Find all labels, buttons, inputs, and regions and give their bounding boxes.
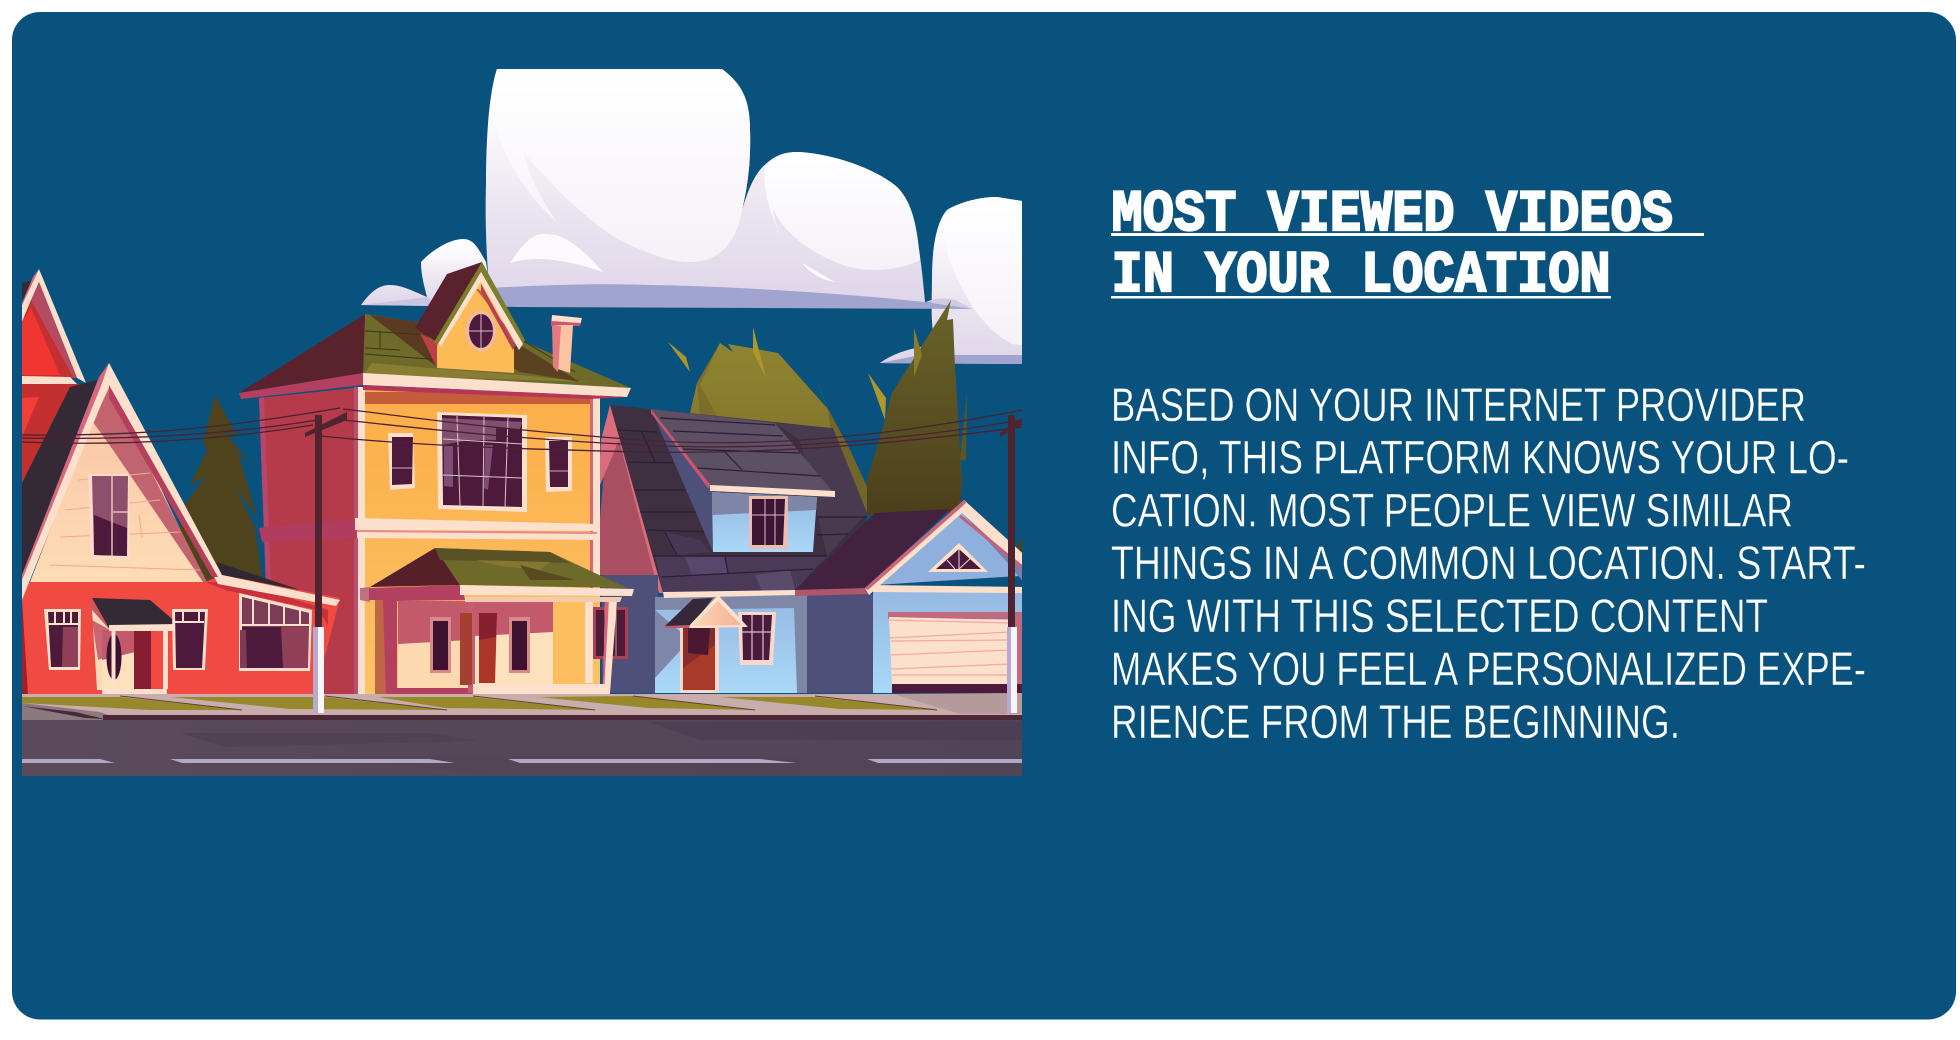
chimney [551,315,582,373]
centre window [172,609,208,670]
garage door [888,612,1022,619]
main roof [363,314,631,388]
front left house [22,363,340,695]
dormer [420,333,437,368]
heading [1112,181,1673,309]
window [738,612,776,665]
upper large window [437,412,527,512]
left pole [305,412,347,713]
illustration: suburban street [22,69,1035,776]
body text [1111,378,1866,748]
roof [610,405,867,593]
gable trim [22,363,340,606]
ground: sidewalk, lawns, road [22,693,1022,776]
dark wall [602,575,658,693]
dormer [655,418,713,552]
left window [44,609,81,670]
clouds [361,69,1022,364]
gable window [88,474,130,559]
right pole [1000,415,1022,713]
heading: IN YOUR LOCATION [1112,242,1611,309]
upper left window [388,433,415,490]
far left red house [22,269,86,500]
utility poles and wires [22,408,1022,713]
round window [466,311,496,351]
body text: CATION. MOST PEOPLE VIEW SIMILAR [1111,484,1793,536]
yellow two-storey house [239,262,634,695]
pink side wall [595,405,663,593]
upper right window [545,437,572,492]
dark side roof [22,380,97,575]
gable wall [30,378,205,582]
blue house [595,405,867,693]
back roof over extension [217,562,300,590]
floor trim [355,518,598,540]
entry door [680,625,719,693]
trees behind houses [668,300,1022,553]
porch gable [665,598,713,628]
pine tree [180,395,262,582]
body text: ING WITH THIS SELECTED CONTENT [1111,589,1768,642]
lower wall [655,595,807,693]
porch [360,548,634,695]
red wing [259,387,363,695]
entry porch [90,598,179,695]
heading: MOST VIEWED VIDEOS [1112,181,1673,248]
garage wing [795,500,1035,693]
heading underlines [1111,233,1704,298]
large window [239,593,312,671]
yellow wall [362,390,600,695]
body text: RIENCE FROM THE BEGINNING. [1111,695,1680,748]
red base [22,575,340,695]
